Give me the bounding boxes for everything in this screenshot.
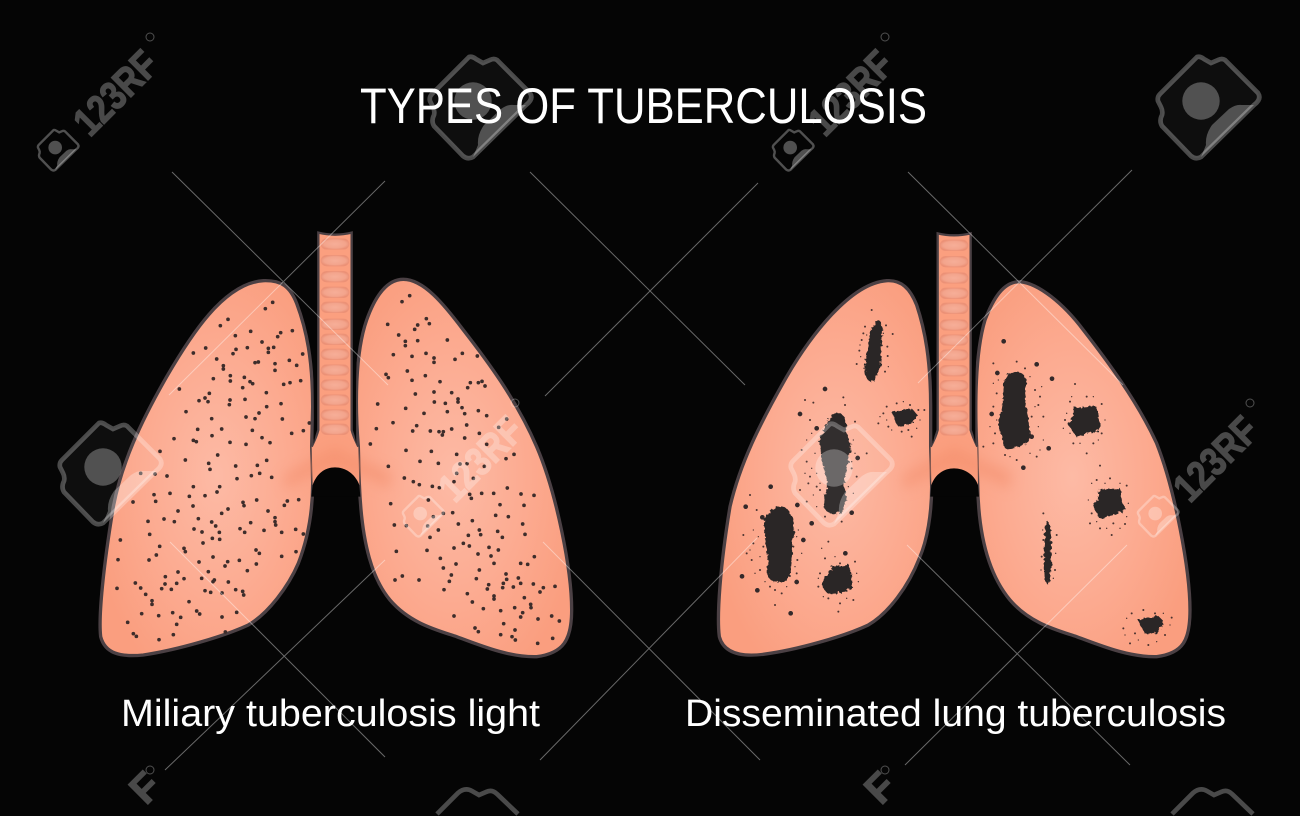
label: miliary tuberculosis: Miliary tuberculosis light [121,693,540,735]
carina gap [311,467,360,497]
large speckles [742,341,1052,613]
right lungs: disseminated tuberculosis [718,233,1190,657]
watermark: top left: 123RF [65,43,167,144]
gap beside trachea, right [353,360,357,444]
label: disseminated tuberculosis: Disseminated lung tuberculosis [685,693,1226,735]
watermark: icon top right [1158,57,1259,158]
bronchi shading [902,447,1012,490]
diagonal guide lines [165,170,1132,770]
right lobe [976,282,1190,657]
right lobe [356,279,572,657]
watermark: middle centre [403,399,532,537]
watermark: icon middle left [60,423,161,524]
trachea and bronchi [312,233,359,485]
bronchi shading [283,447,392,490]
tuberculosis lesions [764,320,1164,634]
cartilage rings [321,239,349,435]
watermark: icon bottom centre fragment [437,789,518,814]
gap beside trachea, left [313,360,317,444]
watermark: icon middle right [791,424,892,525]
watermark: icon bottom right fragment [1172,789,1253,814]
left lungs: miliary tuberculosis [100,233,572,657]
trachea and bronchi [931,233,978,485]
trachea outline [312,233,358,447]
miliary dots left lobe [117,302,309,640]
watermark: middle centre: 123RF [430,409,532,510]
watermark: top right-centre [773,33,902,171]
small speckles [743,310,1172,645]
left lobe [718,281,932,655]
watermark: icon top centre [430,57,531,158]
watermark: middle far right [1138,399,1267,537]
watermark: middle far right: 123RF [1165,409,1267,510]
cartilage rings [940,240,968,435]
watermark: top right-centre: 123RF [800,43,902,144]
left lobe [100,281,313,656]
tiny speckles [750,333,1170,642]
gap beside trachea, left [931,360,936,444]
miliary dots right lobe [370,296,559,643]
watermark: top left [38,33,167,171]
watermark: bottom left fragment: F [121,764,170,812]
trachea outline [931,233,977,447]
watermark: bottom right-centre fragment: F [856,764,905,812]
title: TYPES OF TUBERCULOSIS [360,78,927,134]
gap beside trachea, right [972,360,976,444]
carina gap [930,468,979,497]
